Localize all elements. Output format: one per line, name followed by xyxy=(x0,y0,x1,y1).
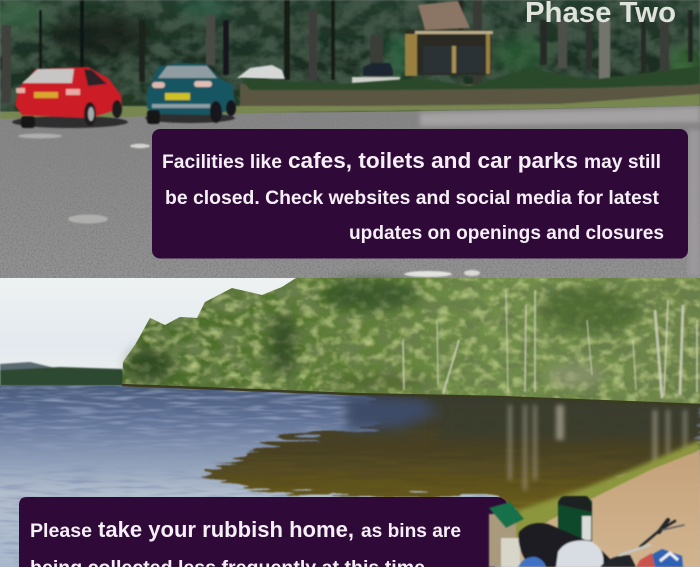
teal car xyxy=(145,63,236,124)
forest background xyxy=(0,0,700,112)
caption line 2: be closed. Check websites and social media for latest xyxy=(165,187,659,209)
sign post xyxy=(489,514,516,567)
green sign xyxy=(489,502,524,528)
icon: rubbish pile by bins xyxy=(489,496,684,567)
green dog bin xyxy=(558,496,592,542)
sandy beach xyxy=(520,450,700,567)
water xyxy=(0,385,700,567)
gravel surface xyxy=(0,106,700,278)
red car xyxy=(12,67,128,128)
woodland xyxy=(122,278,700,406)
shore green shallows xyxy=(500,440,700,545)
caption line 1: Please xyxy=(30,520,92,542)
caption line 3: updates on openings and closures xyxy=(349,222,664,244)
caption line 1: Facilities like xyxy=(162,151,282,173)
caption line 1 xyxy=(162,148,661,173)
bicycle xyxy=(620,520,684,555)
distant hill and tree line xyxy=(0,362,130,386)
blue-white bag xyxy=(518,557,546,567)
photo: forest car park xyxy=(0,0,700,278)
caption box: rubbish xyxy=(19,497,507,567)
notice on post xyxy=(501,538,520,567)
photo: loch and woodland xyxy=(0,278,700,567)
caption box: facilities xyxy=(152,129,688,258)
sky xyxy=(0,278,700,390)
black bags xyxy=(518,523,618,567)
striped bag xyxy=(651,549,683,567)
parked white and dark cars in distance xyxy=(237,63,400,84)
caption line 1: may still xyxy=(584,151,661,173)
dark bag xyxy=(600,555,636,567)
caption line 1: take your rubbish home, xyxy=(98,517,354,542)
caption line 1 xyxy=(30,517,461,542)
grass verge xyxy=(0,66,700,119)
wooden toilet building xyxy=(405,1,493,76)
gravel light patches xyxy=(18,134,480,277)
caption line 1: cafes, toilets and car parks xyxy=(288,148,578,173)
white bag xyxy=(556,540,603,567)
caption line 1: as bins are xyxy=(361,520,461,542)
